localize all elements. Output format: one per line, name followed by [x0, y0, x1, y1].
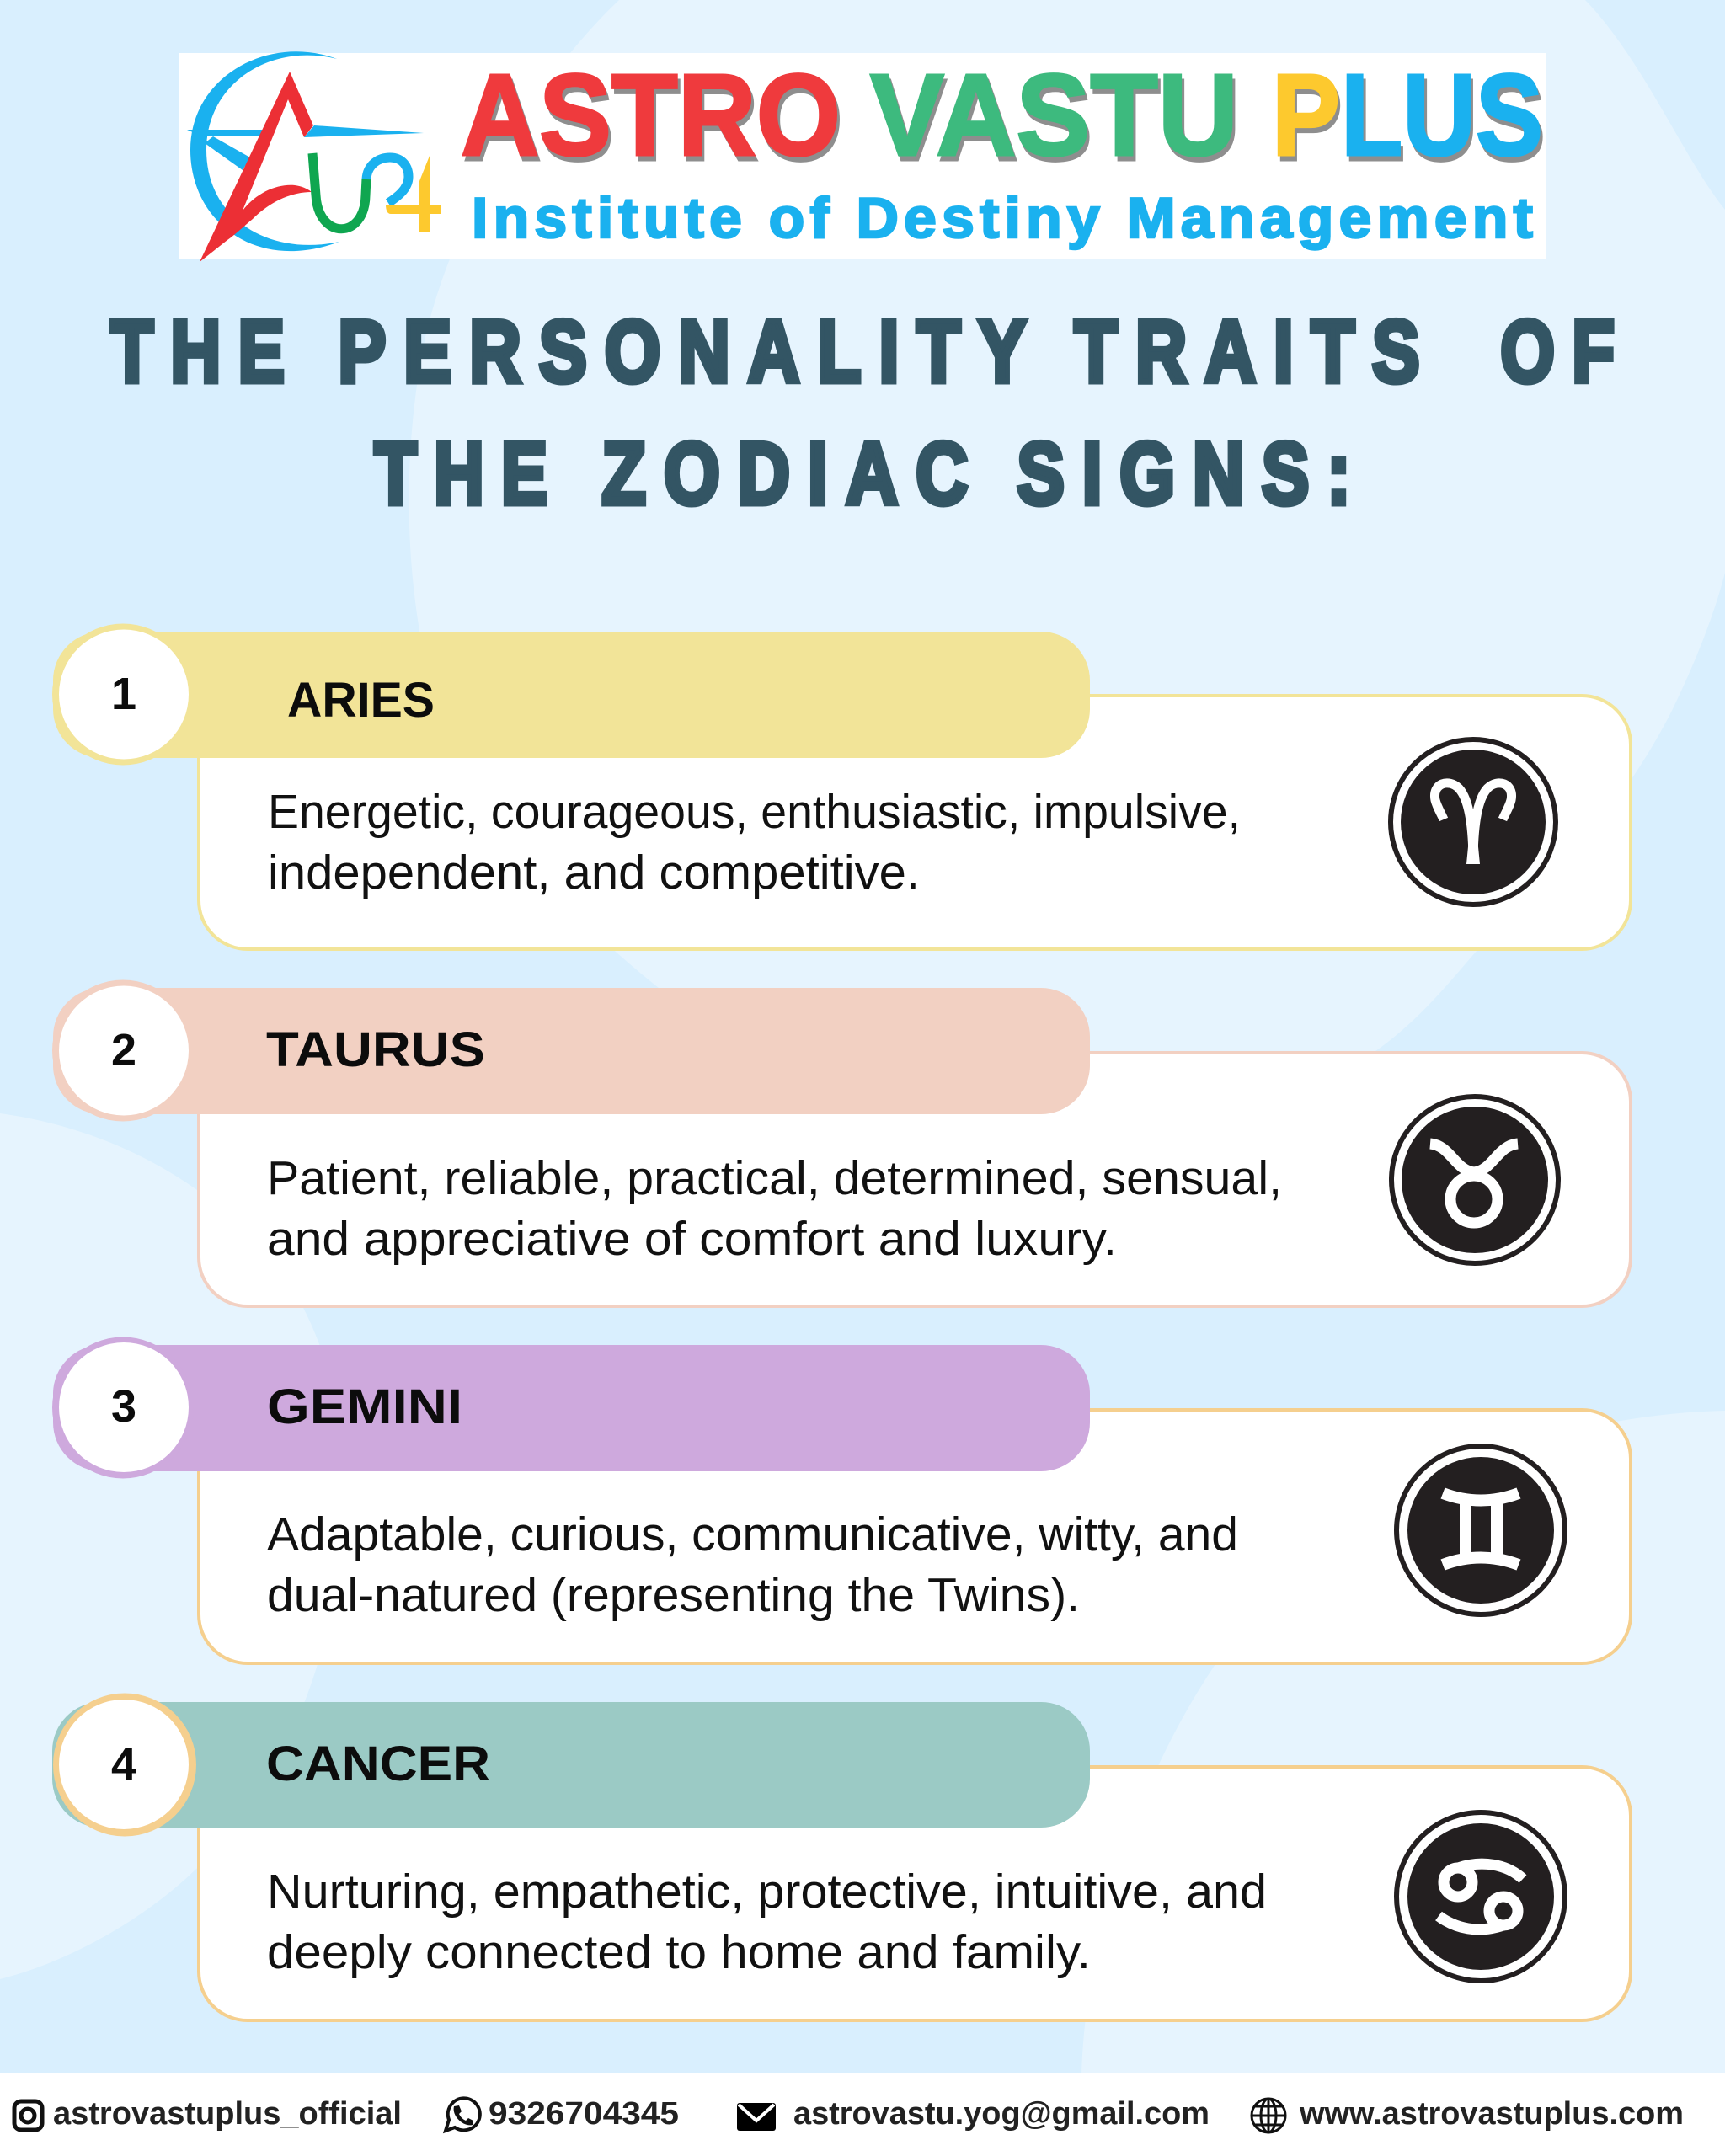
logo wordmark: LUS — [1341, 51, 1543, 180]
logo icon: star and orbit — [187, 51, 441, 262]
description: taurus: Patient, reliable, practical, determined, sensual, — [267, 1151, 1282, 1205]
logo wordmark: VASTU — [870, 51, 1238, 180]
heading: gemini: GEMINI — [267, 1380, 462, 1434]
description: taurus: and appreciative of comfort and luxury. — [267, 1212, 1117, 1266]
logo wordmark: LUS — [1343, 56, 1546, 185]
description: gemini — [267, 1508, 1238, 1622]
description: gemini: Adaptable, curious, communicative, witty, and — [267, 1508, 1238, 1561]
panel: aries — [52, 623, 1631, 949]
icon: gemini symbol — [1397, 1446, 1565, 1614]
title — [111, 303, 1632, 523]
footer contact bar — [0, 2073, 1725, 2156]
icon: whatsapp — [446, 2098, 480, 2131]
phone number: 9326704345 — [489, 2096, 679, 2132]
logo wordmark: P — [1272, 51, 1340, 180]
description: cancer: Nurturing, empathetic, protective, intuitive, and — [267, 1865, 1267, 1919]
description: taurus — [267, 1151, 1282, 1266]
title: THE — [111, 303, 302, 401]
icon: instagram — [14, 2101, 42, 2130]
title: PERSONALITY — [339, 303, 1044, 401]
instagram handle: astrovastuplus_official — [53, 2096, 402, 2132]
logo wordmark: ASTRO — [463, 56, 843, 185]
icon: taurus symbol — [1391, 1097, 1558, 1263]
logo wordmark — [461, 51, 1546, 185]
description: cancer — [267, 1865, 1267, 1979]
description: aries: independent, and competitive. — [268, 846, 920, 899]
description: aries: Energetic, courageous, enthusiastic, impulsive, — [268, 785, 1241, 839]
title: SIGNS: — [1017, 425, 1368, 523]
logo wordmark: P — [1274, 56, 1343, 185]
icon: globe — [1252, 2099, 1285, 2132]
logo wordmark: VASTU — [873, 56, 1241, 185]
heading: cancer: CANCER — [266, 1737, 490, 1791]
icon: mail — [737, 2103, 776, 2131]
title: TRAITS — [1075, 303, 1437, 401]
description: cancer: deeply connected to home and family. — [267, 1925, 1091, 1979]
logo banner — [179, 51, 1546, 262]
title: THE — [374, 425, 564, 523]
panel: gemini — [52, 1337, 1631, 1663]
icon: cancer symbol — [1397, 1812, 1565, 1981]
description: aries — [268, 785, 1241, 899]
logo wordmark: ASTRO — [461, 51, 841, 180]
number 3: 3 — [111, 1381, 136, 1432]
title: OF — [1501, 303, 1632, 401]
description: gemini: dual-natured (representing the Twins). — [267, 1568, 1080, 1622]
number 2: 2 — [111, 1025, 136, 1075]
number 1: 1 — [111, 669, 136, 719]
logo tagline: Institute of Destiny Management — [472, 186, 1538, 250]
title: ZODIAC — [601, 425, 985, 523]
heading: taurus: TAURUS — [266, 1022, 485, 1077]
panel: taurus — [52, 980, 1631, 1306]
website: www.astrovastuplus.com — [1299, 2096, 1684, 2132]
number 4: 4 — [111, 1739, 136, 1790]
heading: aries: ARIES — [287, 673, 435, 728]
email address: astrovastu.yog@gmail.com — [793, 2096, 1210, 2132]
panel: cancer — [52, 1693, 1631, 2020]
icon: aries symbol — [1391, 739, 1556, 905]
